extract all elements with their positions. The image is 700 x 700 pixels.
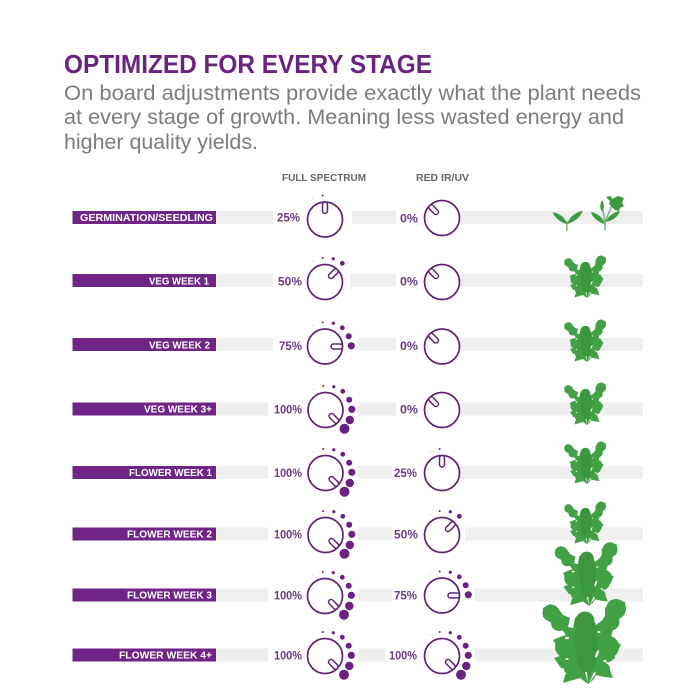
row: veg week 3+ [72,385,643,434]
icon: seedling [553,211,583,231]
column heading: full spectrum: FULL SPECTRUM [282,173,366,184]
row: veg week 3+: 100% [274,404,302,416]
row: veg week 1: 0% [400,276,418,288]
row: germination/seedling: 25% [277,212,300,224]
row: veg week 2: 0% [400,341,418,353]
row: flower week 1: 25% [394,468,417,480]
row: germination/seedling [72,194,643,237]
row: germination/seedling: 0% [400,214,418,226]
row: flower week 1 [72,448,643,497]
row: flower week 1: FLOWER WEEK 1 [129,468,212,479]
row: veg week 1 [72,257,643,300]
row: germination/seedling: GERMINATION/SEEDLING [80,213,213,224]
row: flower week 4+: 100% [274,650,302,662]
row: flower week 2 [72,510,643,559]
row: veg week 1: VEG WEEK 1 [149,276,209,288]
icon: young plant [591,196,624,230]
icon: plant veg week 3 [564,382,606,425]
row: flower week 2: FLOWER WEEK 2 [127,530,212,540]
row: flower week 2: 100% [274,530,302,542]
row: flower week 4+ [72,631,643,680]
row: veg week 3+: 0% [400,404,418,416]
row: flower week 4+: FLOWER WEEK 4+ [119,650,212,662]
title: OPTIMIZED FOR EVERY STAGE [64,49,432,79]
intro text: On board adjustments provide exactly what the plant needs [64,82,641,105]
row: veg week 3+: VEG WEEK 3+ [144,404,212,416]
row: flower week 3 [72,570,643,620]
intro text: at every stage of growth. Meaning less wasted energy and [64,106,624,129]
icon: plant veg week 1 [564,256,606,298]
icon: plant veg week 2 [564,320,606,362]
intro text: higher quality yields. [64,131,258,154]
row: flower week 3: FLOWER WEEK 3 [127,590,212,602]
row: flower week 3: 100% [274,590,302,602]
row: veg week 2: VEG WEEK 2 [149,340,210,352]
row: flower week 1: 100% [274,468,302,480]
icon: plant flower week 2 [564,502,606,544]
icon: plant flower week 3 [555,542,618,606]
row: flower week 2: 50% [394,530,418,542]
row: veg week 1: 50% [278,276,302,288]
intro text [64,82,641,154]
row: flower week 4+: 100% [389,650,417,662]
icon: plant flower week 4 [542,599,626,684]
column heading: red ir/uv: RED IR/UV [416,173,469,184]
row: flower week 3: 75% [394,590,417,602]
row: veg week 2 [72,322,643,364]
row: veg week 2: 75% [279,341,302,353]
icon: plant flower week 1 [564,442,606,484]
